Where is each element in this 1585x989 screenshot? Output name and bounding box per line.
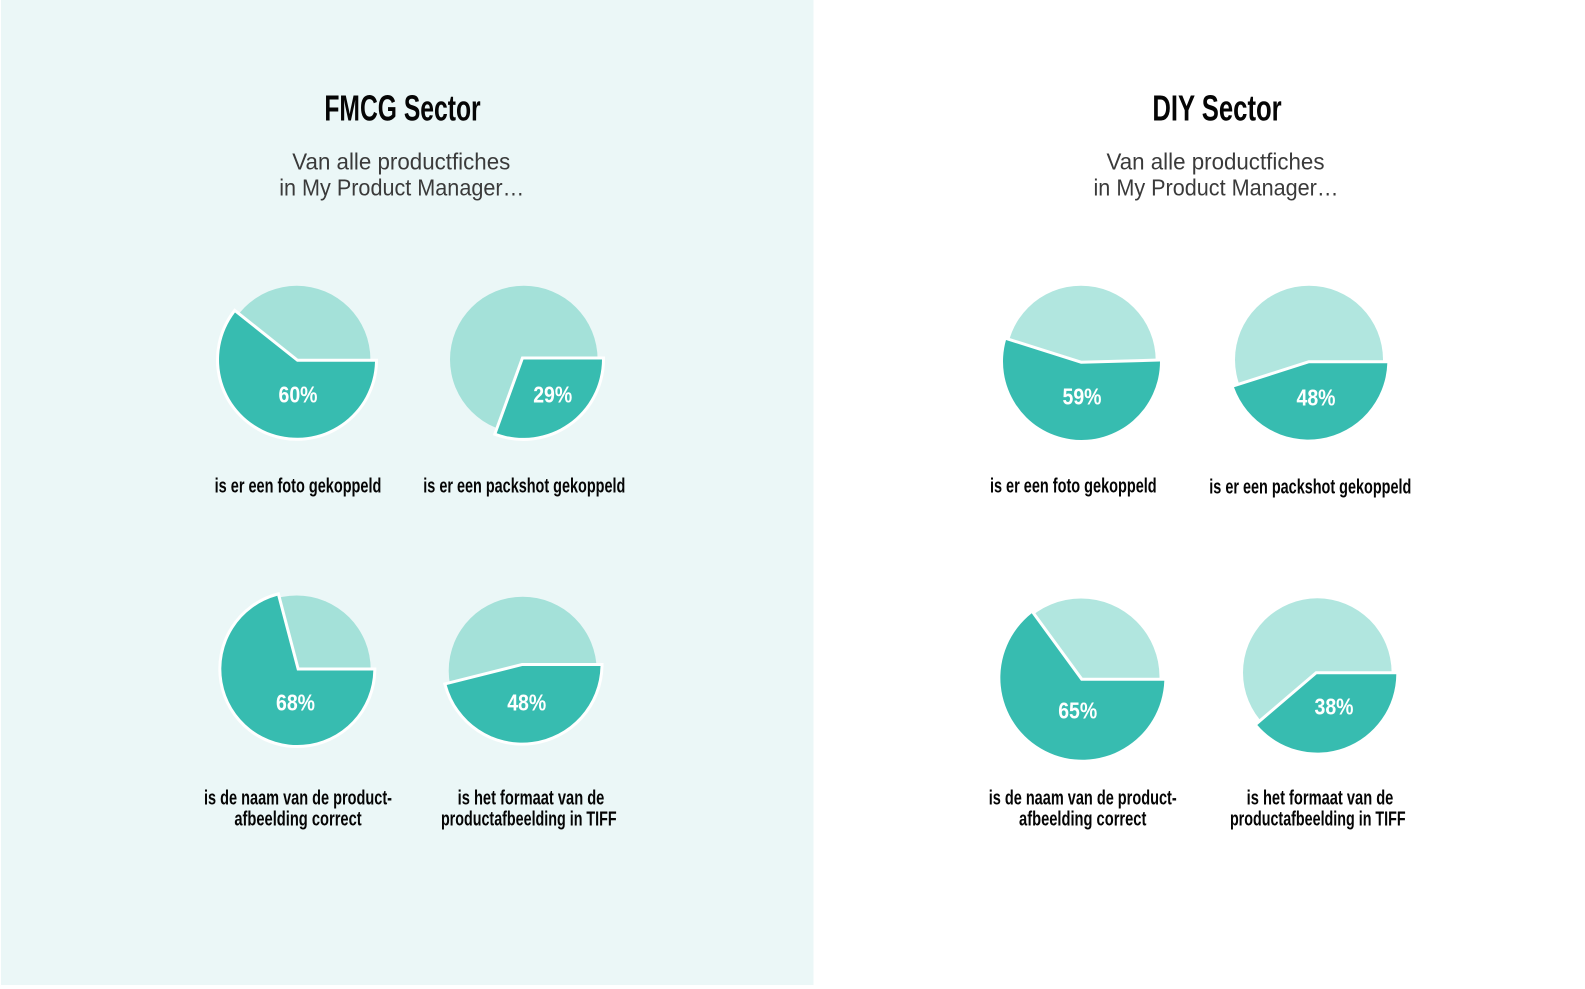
intro text: DIY: [1094, 149, 1338, 201]
heading: FMCG Sector: FMCG Sector: [324, 88, 481, 129]
label: formaat TIFF: [1230, 787, 1406, 830]
label: naam correct: is de naam van de product-: [989, 787, 1177, 809]
label: packshot gekoppeld: is er een packshot gekoppeld: [423, 476, 625, 498]
pie chart: naam correct 68%: [221, 596, 373, 745]
pie chart: foto gekoppeld 59%: [1003, 286, 1160, 440]
intro text: FMCG: Van alle productfiches: [292, 149, 510, 175]
pie chart: foto gekoppeld 59%: 59%: [1062, 384, 1102, 410]
label: foto gekoppeld: is er een foto gekoppeld: [215, 476, 381, 498]
label: naam correct: afbeelding correct: [234, 808, 362, 830]
pie chart: foto gekoppeld 60%: 60%: [278, 382, 318, 408]
pie chart: formaat TIFF 38%: 38%: [1314, 694, 1354, 720]
label: formaat TIFF: is het formaat van de: [1247, 787, 1393, 809]
label: formaat TIFF: is het formaat van de: [458, 787, 604, 809]
label: naam correct: [989, 787, 1177, 830]
pie chart: naam correct 65%: [1000, 598, 1164, 760]
panel: DIY sector: [989, 88, 1411, 830]
label: formaat TIFF: productafbeelding in TIFF: [441, 808, 617, 830]
pie chart: packshot gekoppeld 29%: 29%: [533, 381, 572, 407]
pie chart: naam correct 65%: 65%: [1058, 698, 1097, 724]
panel: FMCG sector: [1, 0, 814, 985]
heading: DIY Sector: DIY Sector: [1152, 88, 1282, 129]
pie chart: packshot gekoppeld 48%: 48%: [1296, 385, 1336, 411]
intro text: DIY: Van alle productfiches: [1106, 149, 1324, 175]
label: packshot gekoppeld: is er een packshot gekoppeld: [1209, 477, 1411, 499]
pie chart: packshot gekoppeld 48%: [1234, 286, 1387, 440]
label: formaat TIFF: productafbeelding in TIFF: [1230, 808, 1406, 830]
pie chart: formaat TIFF 38%: [1243, 598, 1396, 753]
intro text: FMCG: in My Product Manager…: [279, 175, 524, 201]
pie chart: naam correct 68%: 68%: [276, 690, 315, 716]
label: naam correct: [204, 787, 392, 830]
intro text: DIY: in My Product Manager…: [1094, 175, 1338, 201]
intro text: FMCG: [279, 149, 524, 201]
pie chart: formaat TIFF 48%: [447, 597, 600, 745]
pie chart: foto gekoppeld 60%: [219, 286, 375, 438]
label: foto gekoppeld: is er een foto gekoppeld: [990, 476, 1157, 498]
label: naam correct: is de naam van de product-: [204, 787, 392, 809]
label: naam correct: afbeelding correct: [1019, 808, 1147, 830]
pie chart: packshot gekoppeld 29%: [450, 286, 602, 438]
label: formaat TIFF: [441, 787, 617, 830]
pie chart: formaat TIFF 48%: 48%: [507, 690, 546, 716]
